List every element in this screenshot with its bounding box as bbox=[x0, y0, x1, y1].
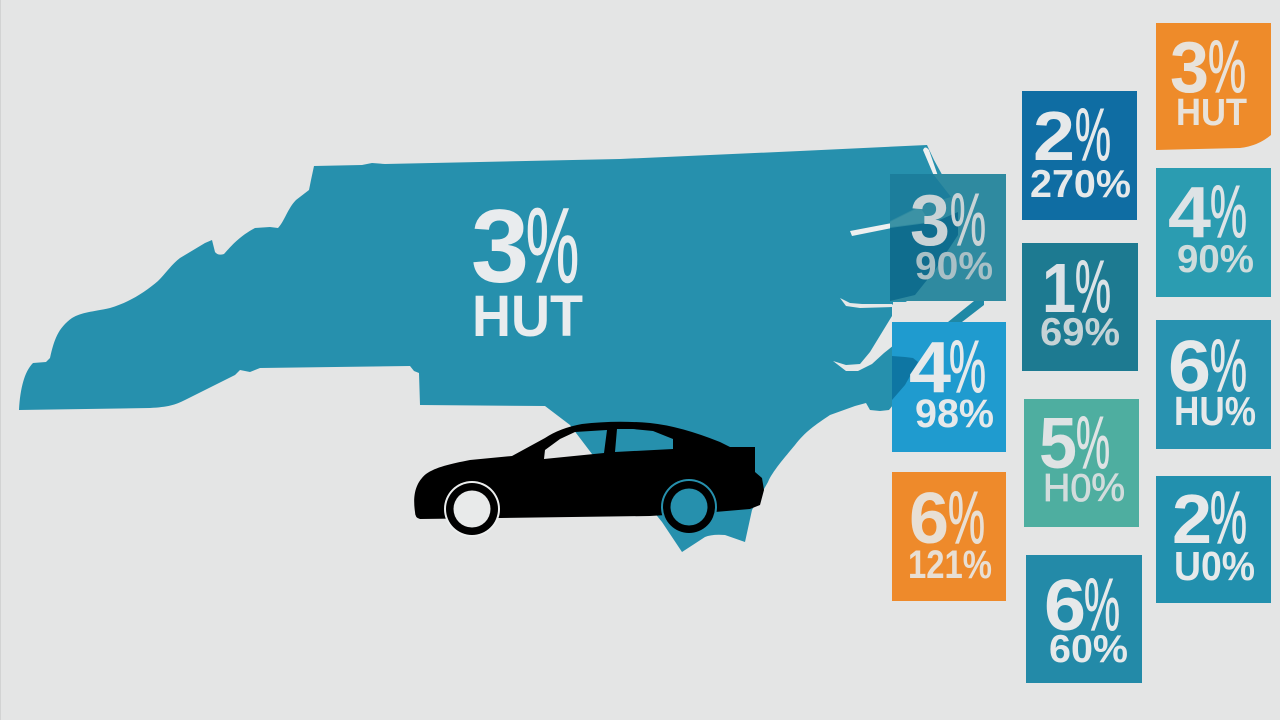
panel: 2% 270%: 270% bbox=[1030, 163, 1131, 206]
panel: 6% 60%: % bbox=[1084, 563, 1120, 646]
panel: 4% 98% blue: 98% bbox=[915, 392, 994, 436]
panel: 3% 90% translucent: 3 bbox=[910, 181, 950, 261]
panel: orange 6% 121%: 6 bbox=[909, 479, 949, 559]
panel: 6% HU% bbox=[1156, 320, 1271, 449]
panel: 5% H0%: H0% bbox=[1043, 467, 1125, 510]
panel: 4% 98% blue: 4 bbox=[909, 328, 951, 408]
panel: 2% 270% bbox=[1022, 91, 1137, 220]
panel: orange 3% HUT: % bbox=[1208, 25, 1246, 108]
rear wheel bbox=[444, 481, 500, 537]
panel: 4% 90% teal: 90% bbox=[1177, 238, 1254, 281]
map label: 3% HUT: HUT bbox=[472, 284, 583, 349]
panel: 3% 90% translucent: 90% bbox=[915, 245, 993, 288]
panel: 2% U0%: 2 bbox=[1172, 480, 1212, 558]
panel: 5% H0% bbox=[1024, 399, 1139, 527]
front wheel bbox=[661, 479, 717, 535]
connector strip between panels bbox=[948, 301, 984, 322]
map label: 3% HUT: 3 bbox=[471, 189, 529, 305]
panel: orange 3% HUT: 3 bbox=[1170, 28, 1209, 108]
panel: orange 3% HUT bbox=[1156, 23, 1271, 150]
panel: 2% U0% bbox=[1156, 476, 1271, 603]
panel: 6% HU%: % bbox=[1210, 324, 1247, 407]
panel: orange 6% 121% bbox=[892, 472, 1006, 601]
panel: orange 6% 121%: % bbox=[948, 476, 985, 559]
panel: 4% 90% teal: % bbox=[1210, 170, 1247, 253]
panel: 6% HU%: 6 bbox=[1168, 327, 1211, 407]
panel: 3% 90% translucent: % bbox=[950, 178, 986, 261]
panel: 1% 69%: 69% bbox=[1040, 311, 1120, 354]
panel: 1% 69%: 1 bbox=[1042, 249, 1076, 327]
map showing through panel bbox=[892, 356, 918, 400]
panel: 4% 98% blue bbox=[892, 322, 1006, 452]
panel: 6% 60%: 60% bbox=[1049, 628, 1128, 671]
map label: 3% HUT bbox=[471, 187, 583, 349]
panel: 2% U0%: U0% bbox=[1174, 543, 1255, 589]
panel: 6% HU%: HU% bbox=[1174, 388, 1256, 434]
panel: 4% 90% teal: 4 bbox=[1168, 173, 1211, 253]
panel: 5% H0%: % bbox=[1076, 401, 1110, 484]
panel: 2% 270%: % bbox=[1075, 93, 1111, 176]
coastal inlets bbox=[833, 148, 1006, 371]
car silhouette bbox=[414, 422, 764, 537]
map label: 3% HUT: % bbox=[526, 187, 579, 305]
map of the state bbox=[19, 145, 960, 552]
panel: 4% 98% blue: % bbox=[949, 325, 986, 408]
panel: 6% 60% bbox=[1026, 555, 1142, 683]
panel: 1% 69% bbox=[1022, 243, 1138, 371]
panel: 2% 270%: 2 bbox=[1033, 97, 1075, 175]
panel: 2% U0%: % bbox=[1210, 476, 1247, 559]
panel: 1% 69%: % bbox=[1075, 245, 1111, 328]
panel: 5% H0%: 5 bbox=[1039, 404, 1077, 484]
panel: 3% 90% translucent bbox=[890, 174, 1006, 301]
panel: orange 6% 121%: 121% bbox=[908, 543, 992, 587]
panel: 6% 60%: 6 bbox=[1044, 566, 1086, 646]
map showing through panel bbox=[890, 174, 958, 301]
panel: orange 3% HUT: HUT bbox=[1176, 92, 1247, 134]
panel: 4% 90% teal bbox=[1156, 168, 1271, 297]
